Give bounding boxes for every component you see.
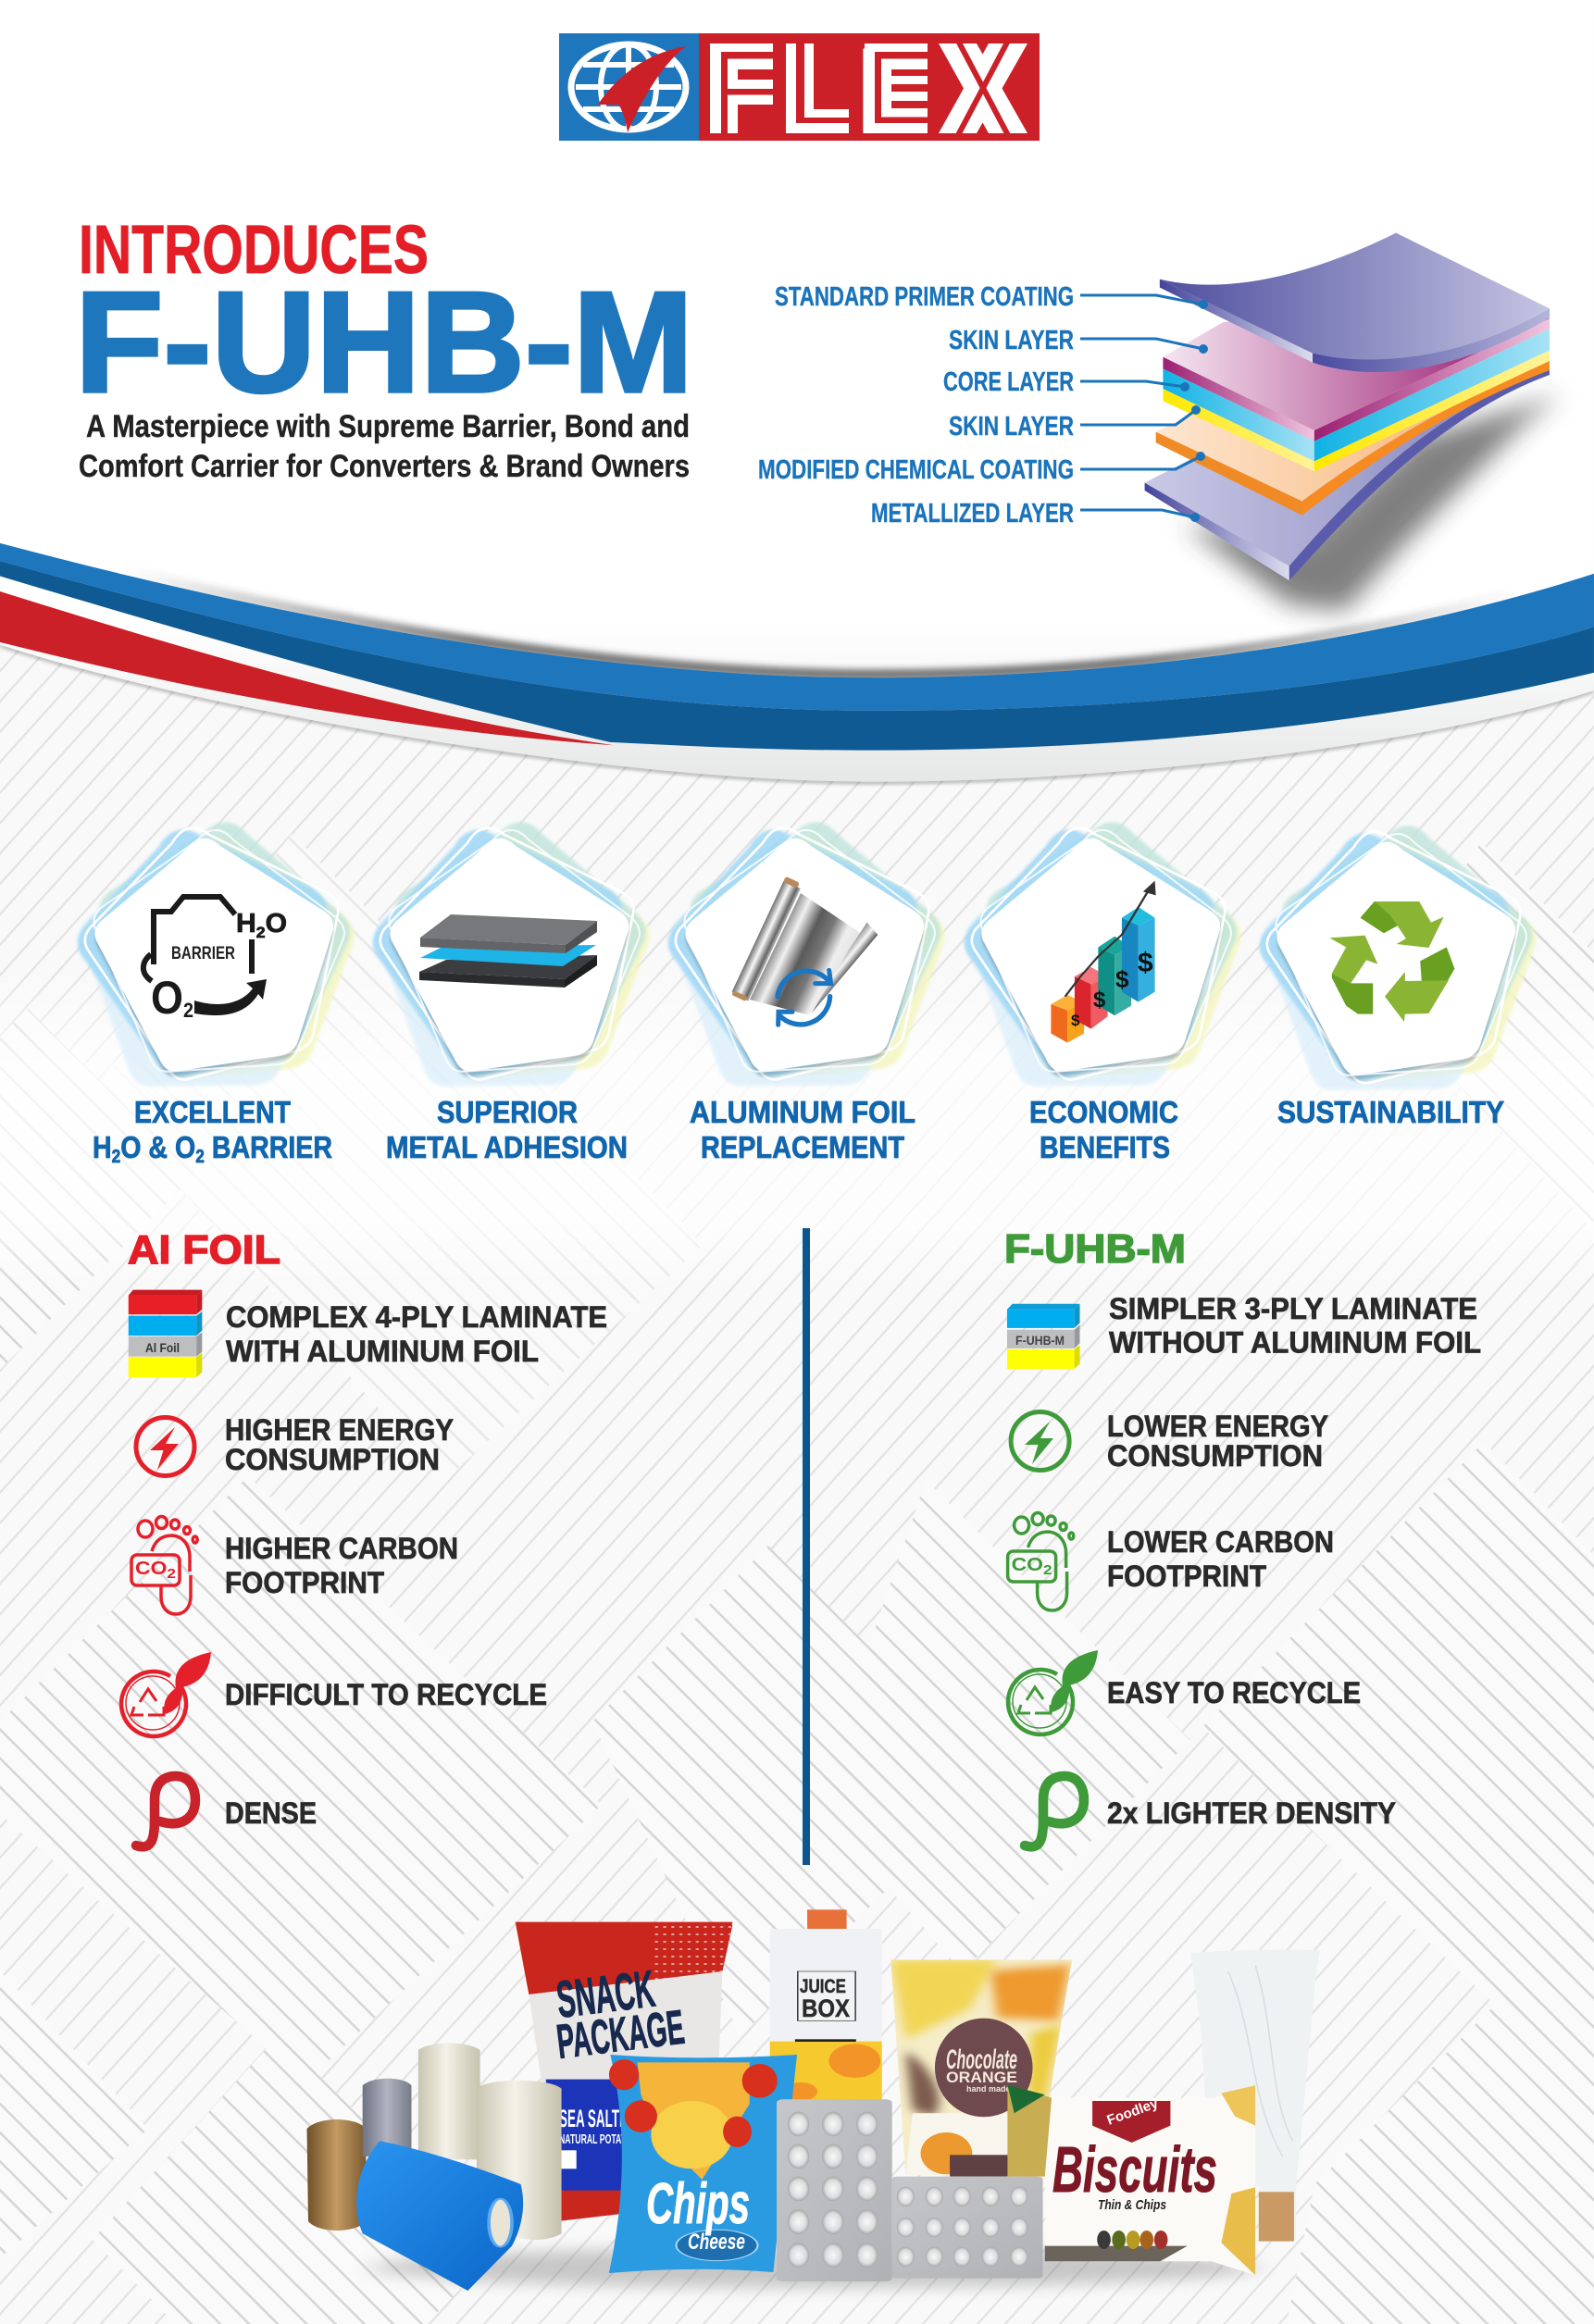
product: snack package: PACKAGE xyxy=(554,2001,687,2069)
badge backdrop xyxy=(1251,817,1538,1105)
product: juice carton: JUICE xyxy=(800,1976,846,1997)
caption: ALUMINUM FOIL xyxy=(690,1095,915,1129)
product: snack package: SNACK xyxy=(554,1958,658,2029)
text: carbon xyxy=(225,1532,458,1599)
panel: F-UHB-M column xyxy=(1004,1226,1481,1846)
text: energy: HIGHER ENERGY xyxy=(225,1413,454,1447)
caption: 2 xyxy=(195,1147,205,1167)
icon: rising bar chart: $ xyxy=(1115,965,1129,993)
icon: carbon footprint: CO xyxy=(1012,1555,1040,1575)
layer stack illustration xyxy=(1145,233,1562,611)
product: blister pack horizontal xyxy=(892,2177,1043,2279)
panel: Al Foil column xyxy=(121,1227,607,1846)
product: biscuits pack: Thin & Chips xyxy=(1098,2197,1166,2213)
icon: energy xyxy=(136,1418,194,1475)
text: energy: CONSUMPTION xyxy=(225,1443,440,1476)
caption: 2 xyxy=(112,1147,120,1167)
heading: AI FOIL xyxy=(128,1227,280,1273)
logo: FLEX xyxy=(559,23,1040,160)
text: laminate: SIMPLER 3-PLY LAMINATE xyxy=(1109,1292,1477,1325)
badge backdrop xyxy=(68,814,355,1101)
logo wordmark: L xyxy=(779,23,846,160)
product: juice carton: BOX xyxy=(802,1995,850,2022)
icon: recycle leaf xyxy=(121,1652,211,1736)
title: INTRODUCES: INTRODUCES xyxy=(79,211,429,288)
icon: foil roll with arrows xyxy=(731,876,878,1025)
layer labels: CORE LAYER xyxy=(943,367,1074,397)
text: laminate xyxy=(1109,1292,1481,1359)
icon: carbon footprint: 2 xyxy=(1043,1562,1052,1578)
subtitle text block: A Masterpiece with Supreme Barrier, Bond and xyxy=(86,409,690,444)
icon: density rho xyxy=(136,1776,195,1846)
badge backdrop xyxy=(659,814,946,1101)
icon: rising bar chart: $ xyxy=(1071,1012,1080,1029)
text: density: 2x LIGHTER DENSITY xyxy=(1107,1796,1396,1830)
subtitle text block: Comfort Carrier for Converters & Brand Owners xyxy=(79,449,690,484)
layer labels: SKIN LAYER xyxy=(949,412,1074,441)
layer labels: MODIFIED CHEMICAL COATING xyxy=(758,455,1074,485)
icon: carbon footprint xyxy=(1008,1512,1074,1610)
icon: recycle leaf xyxy=(1008,1650,1098,1734)
icon: barrier shield: 2 xyxy=(183,999,193,1022)
badge backdrop xyxy=(364,814,651,1101)
product: film rolls xyxy=(307,2043,562,2291)
product: tube xyxy=(1190,1950,1320,2242)
icon: barrier shield: BARRIER xyxy=(171,944,235,963)
icon: barrier shield: O xyxy=(151,972,187,1024)
icon: rising bar chart: $ xyxy=(1138,948,1153,978)
layer labels: METALLIZED LAYER xyxy=(871,499,1074,528)
caption: EXCELLENT xyxy=(134,1095,291,1129)
product: chips bag: Chips xyxy=(646,2172,750,2236)
caption: BENEFITS xyxy=(1040,1130,1170,1164)
product: chips bag: Cheese xyxy=(688,2230,745,2255)
text: laminate: WITHOUT ALUMINUM FOIL xyxy=(1109,1325,1481,1359)
icon: 3-ply stack: F-UHB-M xyxy=(1015,1333,1065,1348)
product: chocolate orange pouch: hand made xyxy=(966,2084,1011,2094)
product: biscuits pack xyxy=(1007,2085,1255,2275)
icon: barrier shield xyxy=(143,897,287,1024)
layer labels: STANDARD PRIMER COATING xyxy=(775,282,1074,312)
panel: packaging products xyxy=(307,1909,1320,2291)
product: chocolate orange pouch xyxy=(890,1959,1074,2177)
subtitle text block xyxy=(79,409,690,484)
text: laminate: COMPLEX 4-PLY LAMINATE xyxy=(226,1300,607,1334)
caption: ECONOMIC xyxy=(1029,1095,1178,1129)
logo wordmark: X xyxy=(944,23,1022,160)
title: F-UHB-M: F-UHB-M xyxy=(75,262,693,422)
text: carbon: FOOTPRINT xyxy=(225,1566,384,1599)
layer labels: SKIN LAYER xyxy=(949,326,1074,355)
leader lines xyxy=(1080,295,1208,522)
icon: density rho xyxy=(1025,1776,1084,1846)
icon: carbon footprint: 2 xyxy=(167,1566,176,1582)
caption: O & O xyxy=(120,1130,195,1164)
icon: bonded slabs xyxy=(419,914,597,988)
panel: barrier badge xyxy=(68,814,355,1167)
badge backdrop xyxy=(955,814,1242,1101)
text: density: DENSE xyxy=(225,1796,317,1830)
icon: barrier shield: 2 xyxy=(256,924,266,941)
product: snack package xyxy=(516,1922,732,2222)
caption: SUSTAINABILITY xyxy=(1277,1095,1504,1129)
product: snack package: NATURAL POTAT xyxy=(559,2131,626,2147)
product: biscuits pack: Biscuits xyxy=(1052,2133,1217,2206)
text: laminate: WITH ALUMINUM FOIL xyxy=(226,1335,539,1368)
text: laminate xyxy=(226,1300,607,1368)
product: blister pack vertical xyxy=(777,2099,892,2281)
product ground shadow xyxy=(370,2247,1259,2288)
heading: F-UHB-M xyxy=(1004,1226,1186,1272)
icon: rising bar chart xyxy=(1051,881,1156,1043)
caption: H xyxy=(93,1130,115,1164)
text: energy xyxy=(1107,1410,1328,1473)
product: chips bag xyxy=(609,2055,797,2273)
caption: REPLACEMENT xyxy=(701,1130,904,1164)
text: carbon: HIGHER CARBON xyxy=(225,1532,458,1565)
product: juice carton xyxy=(770,1909,882,2102)
layer labels xyxy=(758,282,1074,528)
icon: recycle arrows xyxy=(1329,901,1454,1022)
product: snack package: SEA SALTE xyxy=(559,2105,628,2132)
text: energy xyxy=(225,1413,454,1476)
product: chocolate orange pouch: Chocolate xyxy=(946,2044,1017,2075)
icon: energy xyxy=(1011,1412,1069,1470)
icon: 3-ply stack xyxy=(1007,1304,1080,1369)
caption: METAL ADHESION xyxy=(386,1130,628,1164)
text: recycle: DIFFICULT TO RECYCLE xyxy=(225,1678,547,1711)
product: chocolate orange pouch: ORANGE xyxy=(946,2069,1017,2086)
panel: economic benefits badge xyxy=(955,814,1242,1164)
panel: metal adhesion badge xyxy=(364,814,651,1164)
caption: SUPERIOR xyxy=(437,1095,578,1129)
icon: carbon footprint xyxy=(131,1516,197,1614)
logo wordmark: F xyxy=(704,23,770,160)
caption xyxy=(690,1095,915,1164)
caption xyxy=(386,1095,628,1164)
icon: 4-ply stack: Al Foil xyxy=(145,1340,180,1355)
icon: globe with check mark xyxy=(571,44,686,132)
text: carbon: LOWER CARBON xyxy=(1107,1525,1334,1559)
icon: barrier shield: O xyxy=(266,909,287,938)
panel: sustainability badge xyxy=(1251,817,1538,1129)
caption xyxy=(1029,1095,1178,1164)
text: carbon xyxy=(1107,1525,1334,1593)
text: energy: LOWER ENERGY xyxy=(1107,1410,1328,1443)
text: recycle: EASY TO RECYCLE xyxy=(1107,1676,1361,1709)
logo wordmark xyxy=(704,23,1027,160)
icon: rising bar chart: $ xyxy=(1093,988,1106,1013)
logo wordmark: E xyxy=(856,23,925,160)
icon: 4-ply stack xyxy=(129,1290,202,1377)
caption: BARRIER xyxy=(205,1130,332,1164)
text: energy: CONSUMPTION xyxy=(1107,1439,1323,1473)
icon: carbon footprint: CO xyxy=(135,1559,163,1579)
header wave bands xyxy=(0,0,1594,785)
icon: barrier shield: H xyxy=(236,909,255,938)
product: biscuits pack: Foodley xyxy=(1105,2095,1161,2129)
divider xyxy=(803,1228,810,1865)
layered film diagram xyxy=(758,233,1562,611)
caption xyxy=(93,1095,332,1167)
text: carbon: FOOTPRINT xyxy=(1107,1560,1266,1593)
panel: aluminum foil replacement badge xyxy=(659,814,946,1164)
